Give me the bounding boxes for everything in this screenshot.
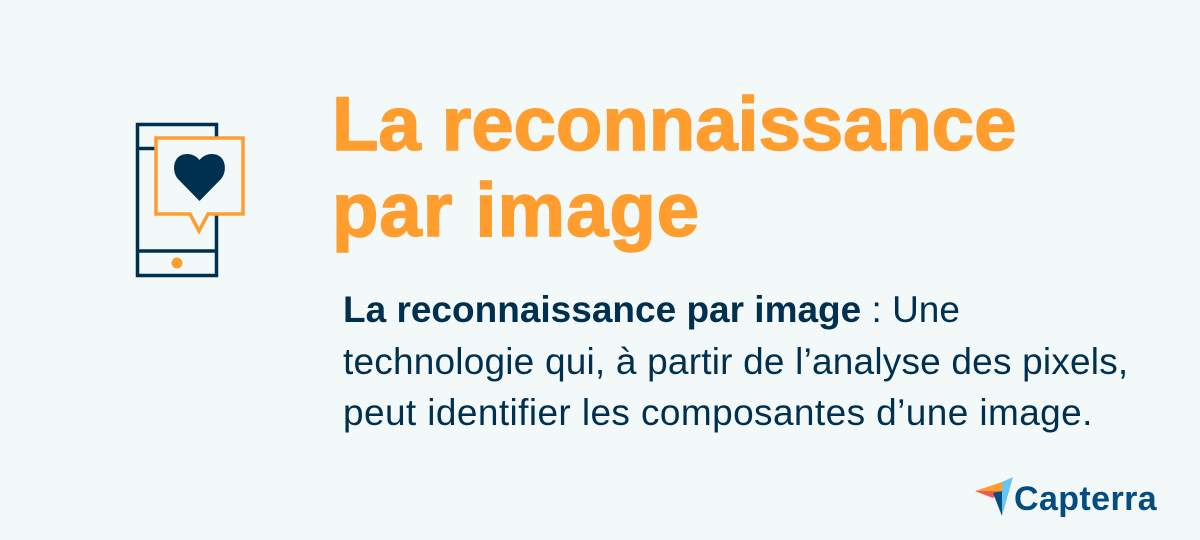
logo mark	[975, 477, 1013, 516]
logo: Capterra	[975, 477, 1157, 518]
definition text: technologie qui, à partir de l’analyse des pixels,	[343, 341, 1128, 382]
icon: heart	[174, 154, 225, 201]
title	[332, 82, 1016, 253]
icon: phone with heart speech bubble	[136, 122, 245, 278]
definition text	[343, 289, 1128, 433]
speech bubble	[156, 138, 243, 231]
definition text: peut identifier les composantes d’une image.	[343, 392, 1093, 433]
phone outline	[137, 124, 216, 276]
phone button	[172, 258, 182, 268]
definition text: La reconnaissance par image : Une	[343, 289, 960, 330]
title: La reconnaissance	[332, 82, 1016, 167]
title: par image	[332, 168, 700, 253]
logo wordmark: Capterra	[1014, 480, 1157, 518]
